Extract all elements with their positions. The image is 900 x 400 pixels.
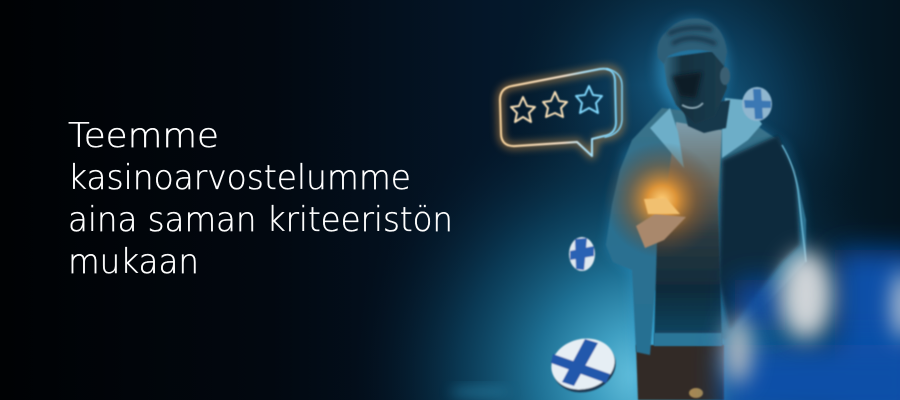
man [604, 18, 806, 400]
star 2 [543, 92, 567, 117]
heading: Teemme [68, 116, 219, 155]
legs [636, 345, 724, 400]
phone light [604, 142, 720, 258]
bubble back edge [605, 69, 622, 137]
jacket right highlight [782, 145, 806, 262]
ear [720, 67, 730, 85]
blurred flag foreground [722, 250, 900, 400]
body rim glow [606, 115, 806, 400]
head glow [656, 18, 728, 114]
chip: behind shoulder [742, 87, 772, 121]
chip: middle [569, 237, 595, 271]
face [663, 50, 727, 124]
heading: kasinoarvostelumme [68, 158, 411, 197]
heading: mukaan [68, 242, 199, 281]
speech bubble with stars [500, 69, 622, 156]
hood [650, 98, 762, 168]
dark jacket right panel [718, 135, 800, 330]
phone [644, 198, 680, 214]
star 3 [576, 86, 602, 113]
bubble glow [500, 69, 621, 156]
heading: aina saman kriteeristön [68, 200, 453, 239]
hair shading [668, 28, 716, 44]
bubble outline [500, 69, 616, 156]
neck [683, 100, 730, 133]
star 1 [511, 97, 535, 122]
heading [68, 116, 453, 281]
hand [636, 214, 686, 248]
face shade [672, 72, 702, 98]
chip: bottom [546, 332, 621, 399]
jacket [606, 108, 806, 355]
hem [654, 333, 722, 346]
smile [682, 103, 703, 108]
hair [657, 19, 727, 66]
shirt [654, 122, 722, 345]
